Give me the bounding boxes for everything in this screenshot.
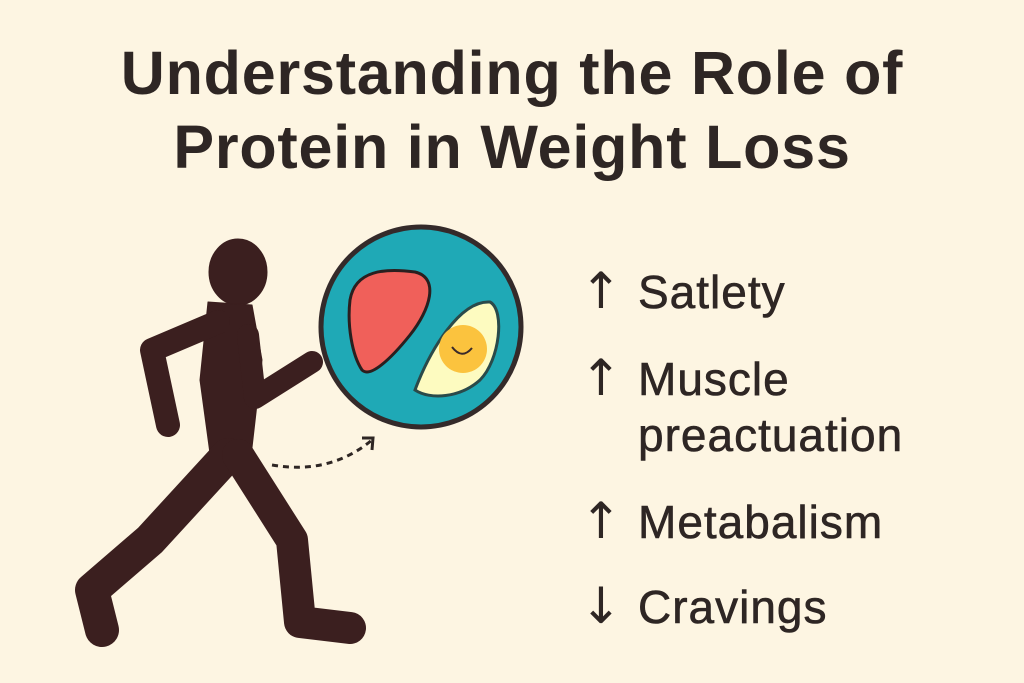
list: effects: ↓	[580, 577, 622, 635]
list: effects: ↑	[580, 492, 622, 550]
list: effects: preactuation	[638, 409, 903, 461]
title: Understanding the Role of	[121, 39, 903, 107]
list: effects: ↑	[580, 349, 622, 407]
list: effects	[580, 262, 903, 635]
icon: plate with meat and egg	[321, 227, 521, 427]
arrow: dotted curve	[272, 440, 372, 467]
list: effects: ↑	[580, 262, 622, 320]
icon: runner silhouette	[92, 239, 350, 630]
title: Protein in Weight Loss	[173, 113, 851, 181]
list: effects: Metabalism	[638, 496, 883, 548]
title	[121, 39, 903, 181]
list: effects: Muscle	[638, 353, 790, 405]
list: effects: Cravings	[638, 581, 828, 633]
list: effects: Satlety	[638, 266, 786, 318]
